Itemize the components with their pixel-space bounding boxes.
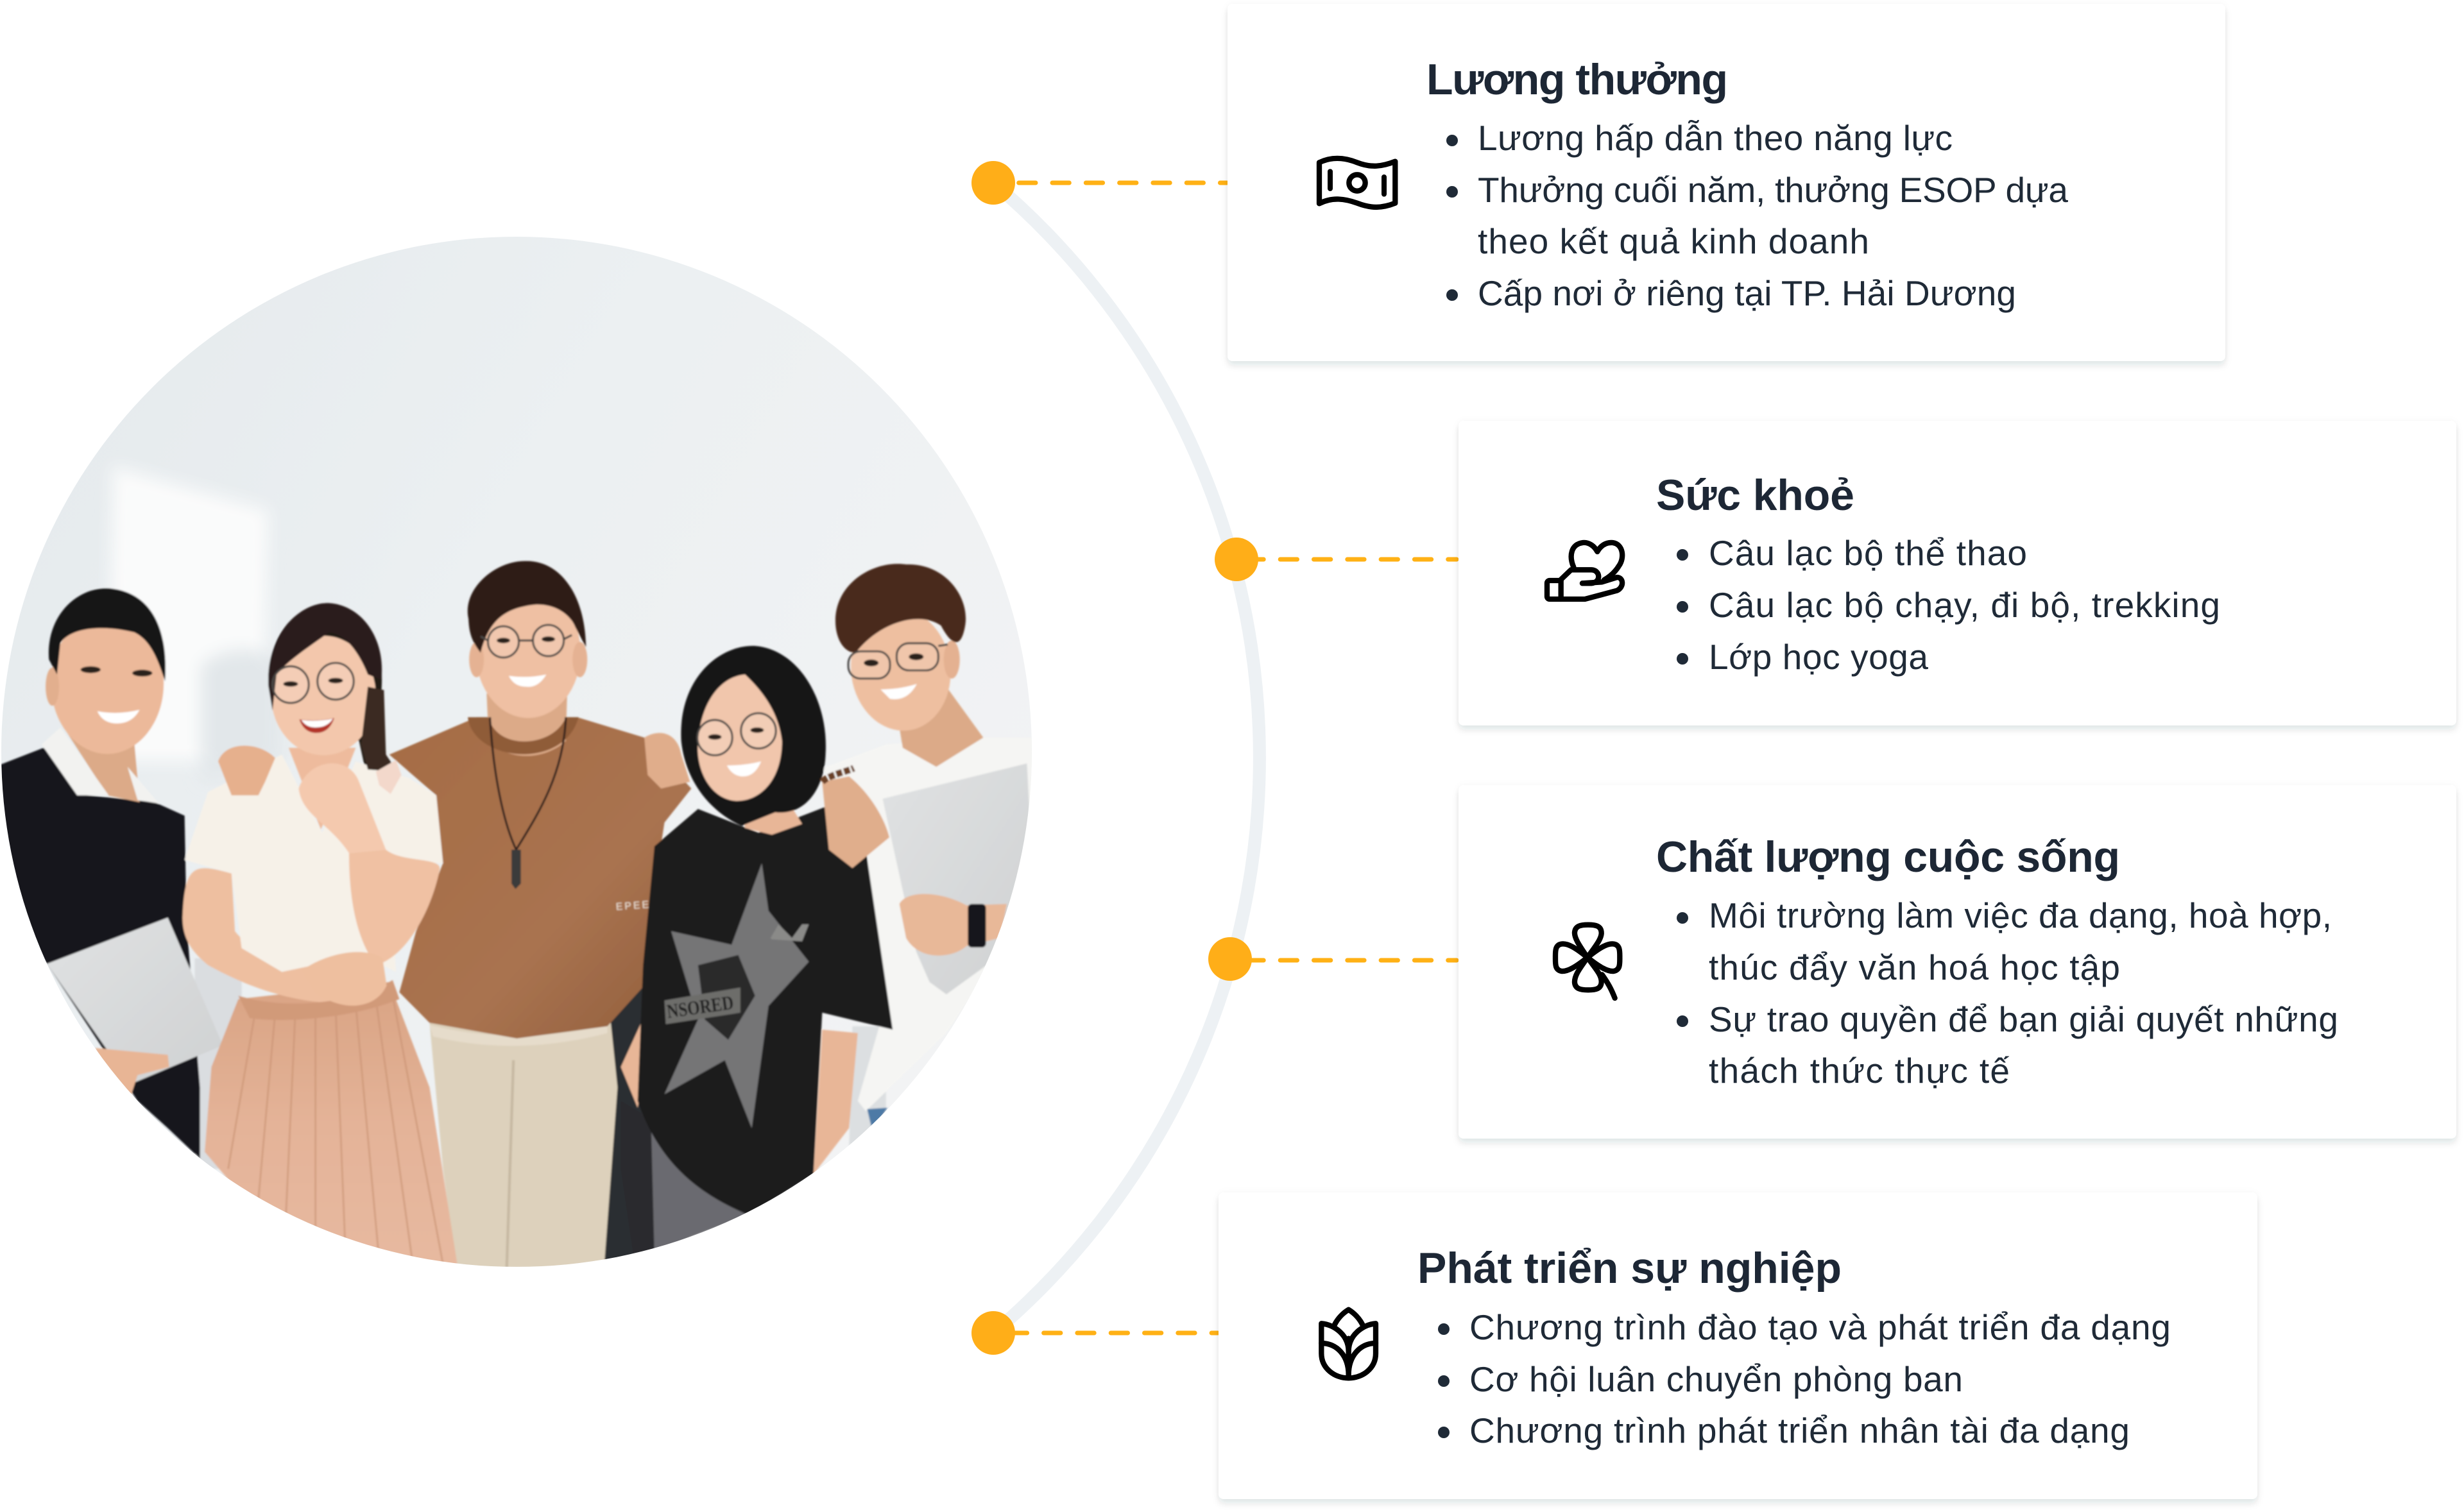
connector 4: dashed line (977, 1330, 1218, 1336)
heading: Lương thưởng (1426, 55, 1728, 104)
arc connecting the four points (993, 183, 1260, 1333)
bullet list: Câu lạc bộ chạy, đi bộ, trekking (1709, 585, 2220, 625)
person 5: curly hair, white tee, holding laptop (822, 564, 1037, 1132)
person 2: woman in cream blouse and pleated skirt (183, 603, 458, 1268)
icon: hand holding heart (1547, 543, 1622, 599)
connector 3: dashed line (1247, 958, 1457, 962)
bullet list (1677, 533, 2220, 677)
heading: Sức khoẻ (1656, 471, 1854, 520)
bullet list: Chương trình đào tạo và phát triển đa dạng (1469, 1307, 2171, 1347)
connector 1: dashed line (985, 181, 1227, 185)
point 1: orange dot (971, 161, 1015, 205)
person 4: short black hair, black star tee: NSORED (665, 992, 735, 1022)
bullet list: thúc đẩy văn hoá học tập (1709, 947, 2120, 987)
panel: Sức khoẻ (1459, 421, 2456, 725)
person 1: black polo, holding laptop (0, 588, 223, 1158)
bullet list (1677, 895, 2338, 1090)
bullet list: Môi trường làm việc đa dạng, hoà hợp, (1709, 895, 2332, 935)
point 3: orange dot (1208, 937, 1252, 981)
bullet list: Câu lạc bộ thể thao (1709, 533, 2027, 573)
bullet list (1446, 118, 2068, 313)
bullet list: thách thức thực tế (1709, 1051, 2010, 1090)
panel: Chất lượng cuộc sống (1459, 785, 2456, 1139)
photo: team of five smiling in front of a pale wall (0, 231, 1040, 1277)
icon: four-leaf clover (1555, 925, 1620, 998)
bullet list: theo kết quả kinh doanh (1478, 221, 1869, 261)
connector 2: dashed line (1247, 557, 1457, 562)
bullet list: Cấp nơi ở riêng tại TP. Hải Dương (1478, 273, 2016, 313)
bullet list: Sự trao quyền để bạn giải quyết những (1709, 999, 2338, 1039)
bullet list: Lớp học yoga (1709, 637, 1928, 677)
heading: Phát triển sự nghiệp (1417, 1244, 1842, 1293)
bullet list: Lương hấp dẫn theo năng lực (1478, 118, 1953, 158)
icon: wavy banknote (1319, 158, 1395, 207)
point 2: orange dot (1215, 538, 1258, 581)
bullet list (1438, 1307, 2171, 1450)
heading: Chất lượng cuộc sống (1656, 833, 2120, 881)
person 3: brown tee, beige trousers, necklace: EPEET (615, 899, 659, 913)
point 4: orange dot (971, 1311, 1015, 1355)
bullet list: Cơ hội luân chuyển phòng ban (1469, 1359, 1963, 1399)
panel: Lương thưởng (1228, 4, 2225, 361)
icon: wheat / sprout (1321, 1310, 1376, 1378)
person 3: brown tee, beige trousers, necklace (389, 561, 691, 1268)
person 4: short black hair, black star tee (621, 646, 893, 1260)
bullet list: Chương trình phát triển nhân tài đa dạng (1469, 1411, 2130, 1450)
bullet list: Thưởng cuối năm, thưởng ESOP dựa (1478, 170, 2068, 210)
panel: Phát triển sự nghiệp (1219, 1192, 2257, 1499)
